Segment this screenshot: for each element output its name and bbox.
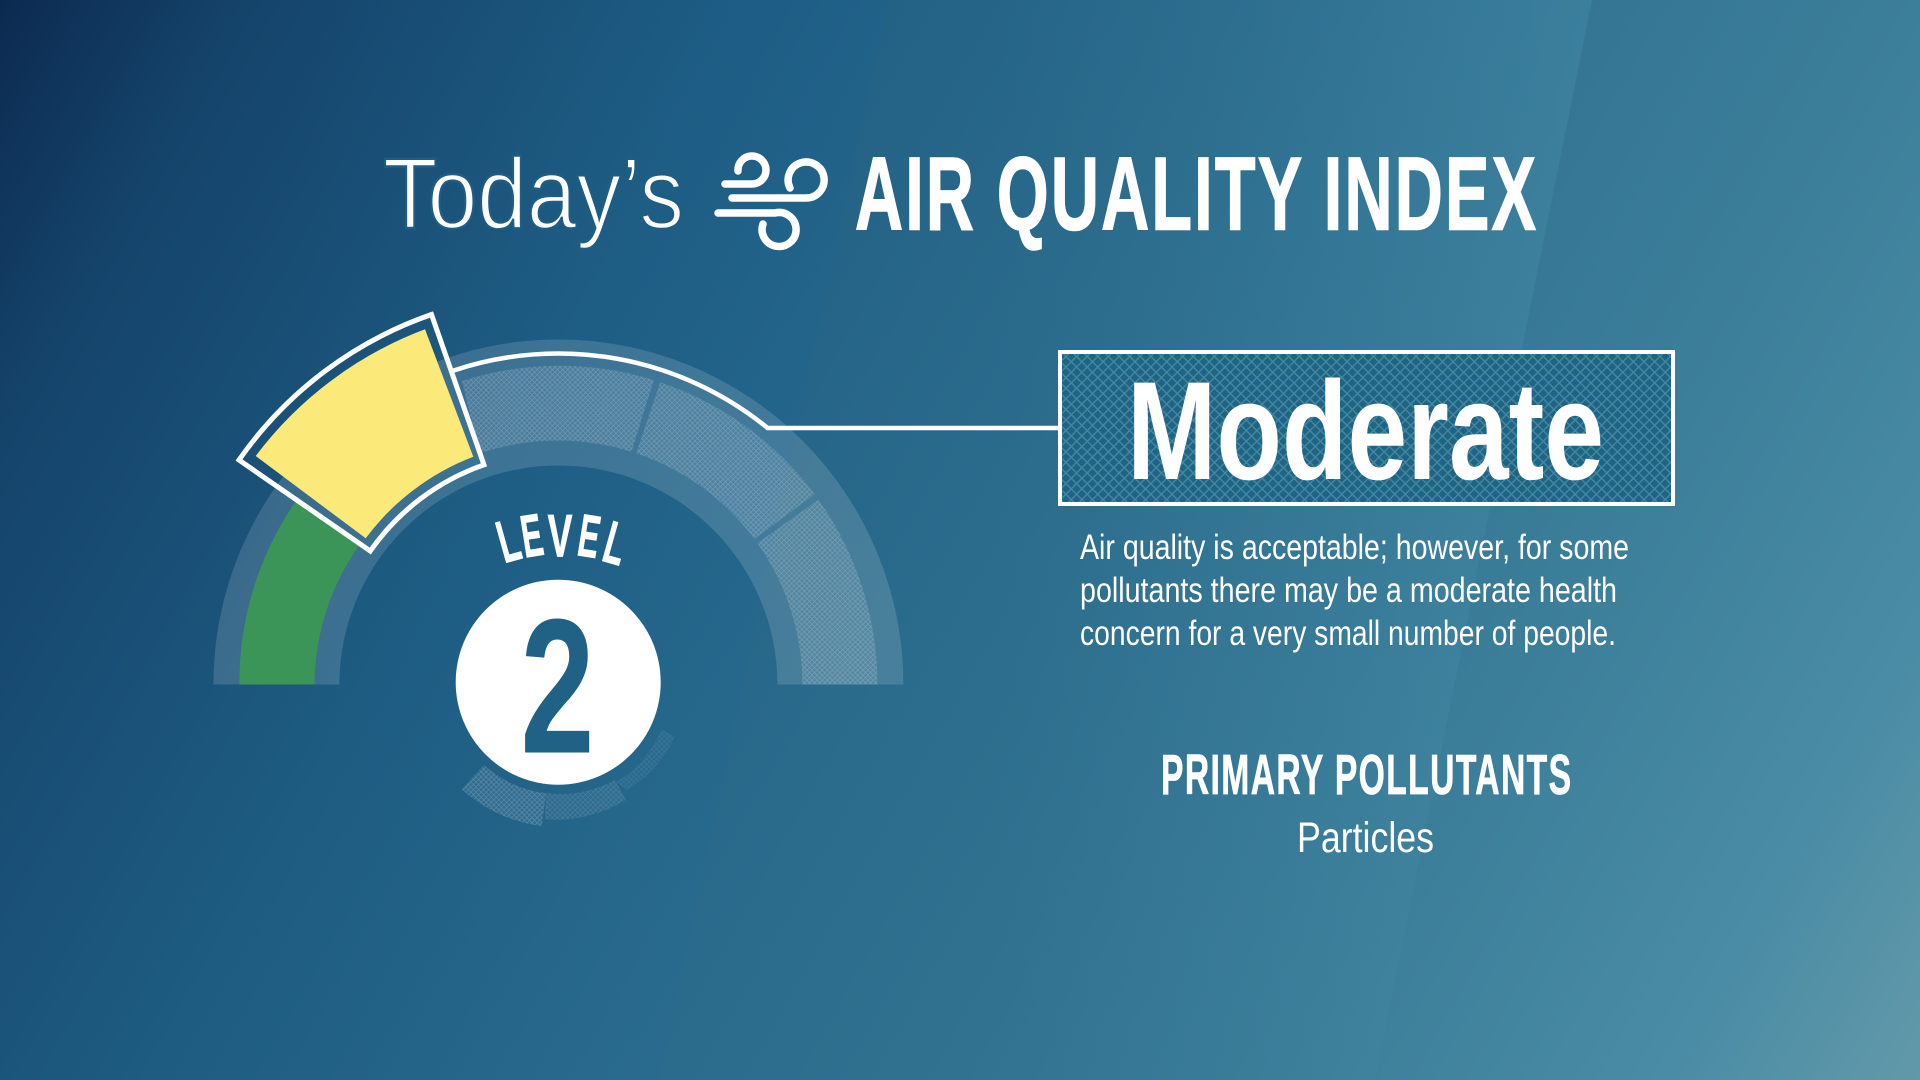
segment: level 5 inactive <box>757 500 877 684</box>
small arc: middle <box>545 780 626 820</box>
primary pollutants heading: PRIMARY POLLUTANTS <box>1161 743 1571 806</box>
connector line <box>453 354 1060 428</box>
rating: moderate: Moderate <box>1127 352 1604 509</box>
label: level: E <box>516 502 547 571</box>
label: level: E <box>574 503 605 572</box>
description text: concern for a very small number of people. <box>1080 614 1616 653</box>
icon: wind <box>718 156 824 247</box>
rating box <box>1060 352 1673 509</box>
primary pollutants <box>1161 743 1571 862</box>
gauge band <box>213 340 903 684</box>
level number: 2 <box>520 578 594 794</box>
label: level <box>490 502 634 579</box>
label: level: L <box>490 507 528 576</box>
label: level: L <box>596 509 634 579</box>
segment: level 4 inactive <box>636 382 814 539</box>
small arc: right <box>616 729 675 790</box>
segment: level 3 inactive <box>462 366 654 454</box>
title: Today's: Today’s <box>383 138 684 250</box>
description text: Air quality is acceptable; however, for some <box>1080 528 1629 567</box>
title <box>383 135 1536 252</box>
primary pollutants value: Particles <box>1297 814 1434 862</box>
level circle <box>456 580 661 785</box>
description text: pollutants there may be a moderate health <box>1080 571 1617 610</box>
rating box frame <box>1060 352 1673 504</box>
segment: level 2 highlighted yellow <box>239 314 484 551</box>
label: level: V <box>548 502 572 570</box>
segment: level 1 green <box>239 501 359 684</box>
title: Air Quality Index: AIR QUALITY INDEX <box>855 135 1536 252</box>
description text <box>1080 528 1629 653</box>
gauge <box>213 314 1060 826</box>
small arc: left <box>462 765 546 826</box>
